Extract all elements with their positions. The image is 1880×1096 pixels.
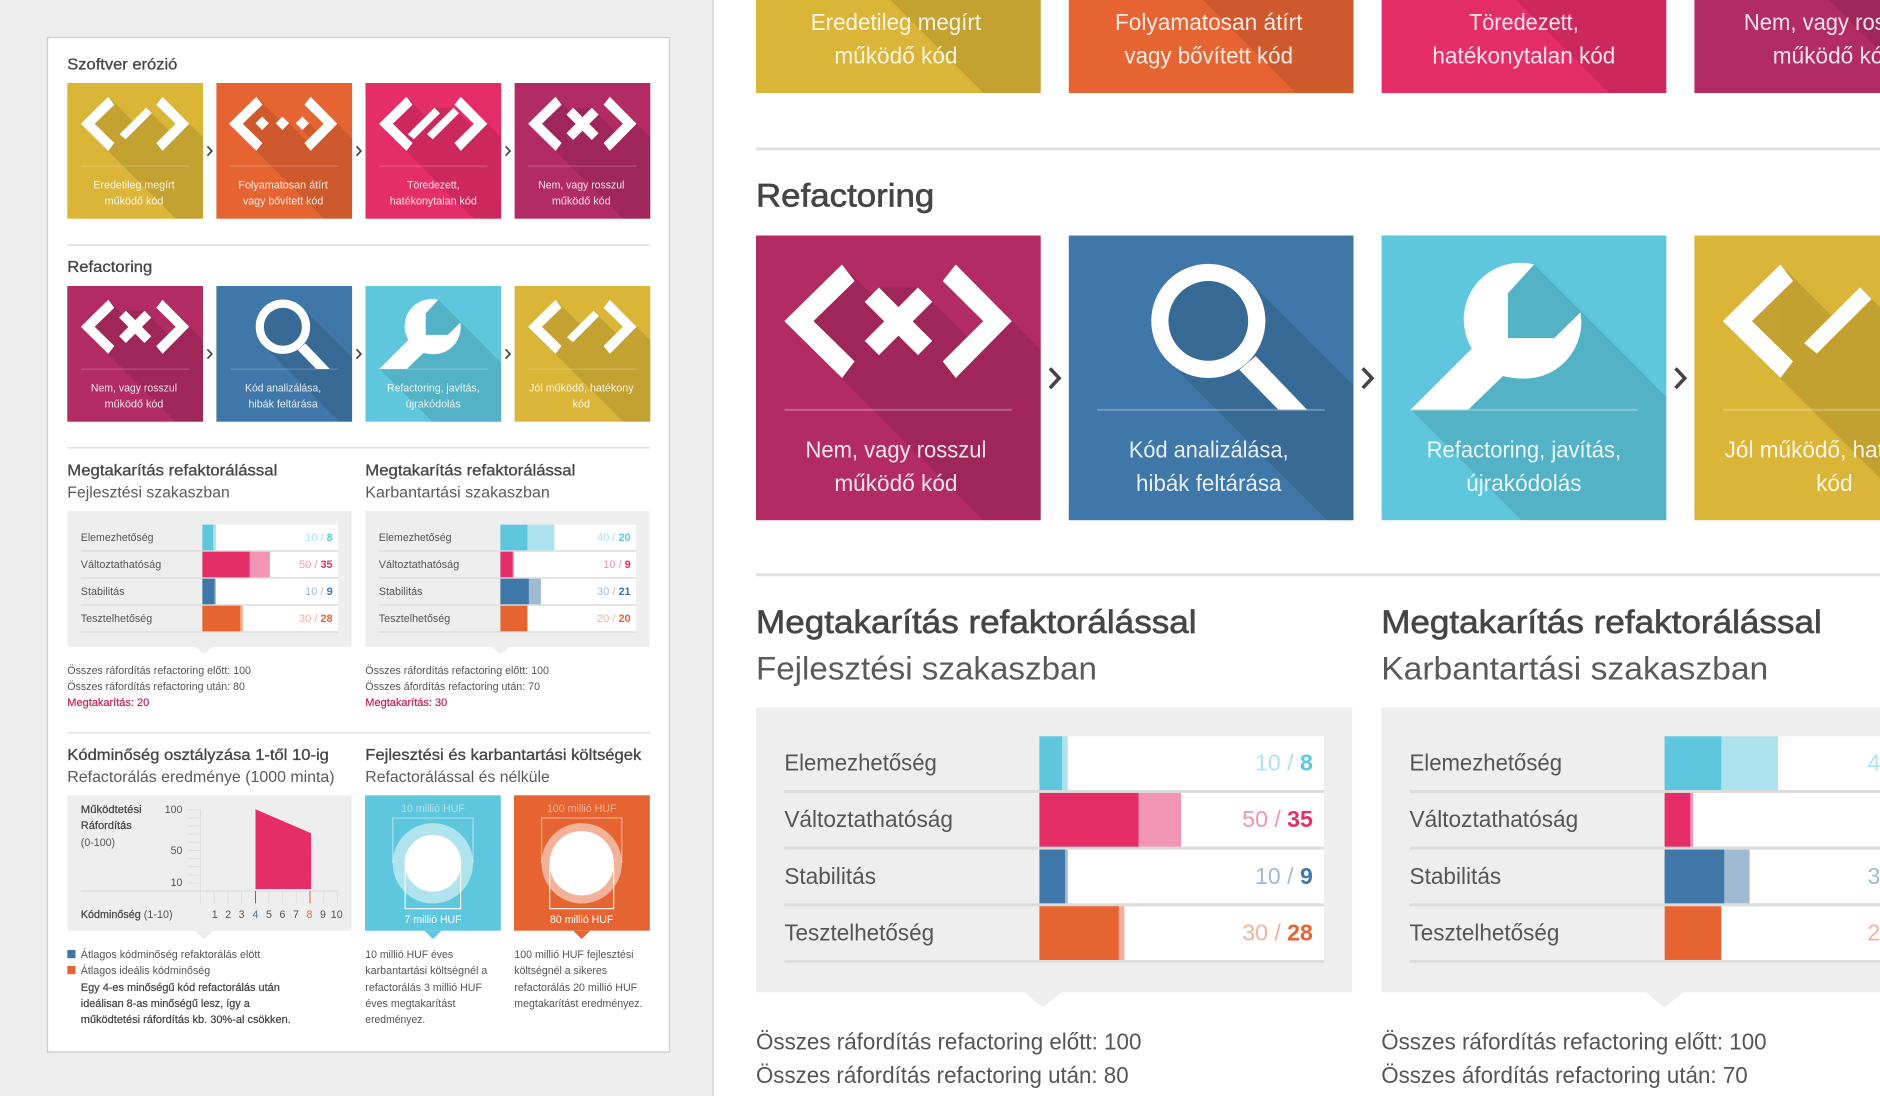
row: refactoring tiles <box>67 286 650 422</box>
right panel background <box>712 0 1880 1096</box>
area chart: 9 <box>320 909 326 921</box>
zoom divider <box>756 147 1880 150</box>
bar chart: 30 / 21 <box>597 586 631 598</box>
text: fejlesztési megtakarítás: refactorálás 20 millió HUF <box>514 982 637 994</box>
bar chart: Tesztelhetőség <box>81 613 152 625</box>
zoom bar chart: Elemezhetőség <box>784 750 937 776</box>
heading: Megtakarítás refaktorálással <box>365 462 575 479</box>
zoom tile: folyamatosan átírt kód: Folyamatosan átírt <box>1115 9 1303 35</box>
summary text: Megtakarítás: 20 <box>67 697 149 709</box>
text: karbantartási megtakarítás: refactorálás 3 millió HUF <box>365 982 482 994</box>
text: fejlesztési megtakarítás: 100 millió HUF fejlesztési <box>514 949 634 961</box>
divider <box>67 244 650 246</box>
text: karbantartási megtakarítás: karbantartási költségnél a <box>365 965 488 977</box>
zoom tile: töredezett kód: Töredezett, <box>1469 9 1579 35</box>
bar chart: 10 / 8 <box>305 532 333 544</box>
legend: működtetési ráfordítás kb. 30%-al csökken. <box>81 1014 291 1026</box>
subheading: Refactorálás eredménye (1000 minta) <box>67 769 335 786</box>
divider <box>67 447 650 449</box>
sheet card <box>48 38 670 1052</box>
tile: töredezett kód: hatékonytalan kód <box>390 196 477 208</box>
tile: rosszul működő kód: Nem, vagy rosszul <box>538 180 624 192</box>
tile: rosszul működő kód <box>514 83 650 219</box>
text: karbantartási megtakarítás: eredményez. <box>365 1014 425 1026</box>
summary text <box>67 665 251 709</box>
zoom bar chart <box>1381 708 1880 1008</box>
zoom subheading: Fejlesztési szakaszban <box>756 650 1097 686</box>
bar chart: Stabilitás <box>379 586 423 598</box>
zoom arrow <box>1363 368 1372 388</box>
heading: Megtakarítás refaktorálással <box>67 462 277 479</box>
legend: Átlagos ideális kódminőség <box>81 964 210 977</box>
zoom tile: refactoring, javítás: Refactoring, javítás, <box>1427 436 1621 462</box>
zoom bar chart: 10 / 8 <box>1255 750 1313 776</box>
tile: jól működő kód: Jól működő, hatékony <box>529 383 634 395</box>
zoom arrow <box>1676 368 1685 388</box>
zoom bar chart: 10 / 9 <box>1255 863 1313 889</box>
arrow <box>356 146 361 156</box>
tile: refactoring, javítás: újrakódolás <box>406 399 461 411</box>
area chart: 50 <box>171 845 182 857</box>
tile: kód analizálása <box>216 286 352 422</box>
arrow <box>207 349 212 359</box>
tile: rosszul működő kód: működő kód <box>105 399 163 411</box>
bar chart: Tesztelhetőség <box>379 613 450 625</box>
left page background <box>0 0 712 1096</box>
tile: rosszul működő kód: Nem, vagy rosszul <box>91 383 177 395</box>
panel: megtakarítás fejlesztési szakaszban <box>67 462 352 709</box>
tile: eredetileg megírt kód: működő kód <box>105 196 163 208</box>
bar chart <box>365 511 650 654</box>
zoom bar chart: Tesztelhetőség <box>784 919 934 945</box>
text: fejlesztési megtakarítás: költségnél a sikeres <box>514 965 607 977</box>
text: karbantartási megtakarítás: éves megtakarítást <box>365 998 456 1010</box>
area chart: 5 <box>266 909 272 921</box>
tile: jól működő kód <box>514 286 650 422</box>
heading: Szoftver erózió: Szoftver erózió <box>67 57 177 74</box>
cost diagram: karbantartás: 10 millió HUF <box>401 803 465 815</box>
text: fejlesztési megtakarítás <box>514 949 642 1010</box>
tile: kód analizálása: Kód analizálása, <box>245 383 321 395</box>
bar chart: 40 / 20 <box>597 532 631 544</box>
area chart: 4 <box>253 909 259 921</box>
zoom tile: rosszul működő kód <box>1694 0 1880 94</box>
zoom row: software erosion tiles <box>756 0 1880 94</box>
tile: eredetileg megírt kód: Eredetileg megírt <box>93 180 175 192</box>
summary text: Összes ráfordítás refactoring után: 80 <box>67 681 245 693</box>
arrow <box>207 146 212 156</box>
summary text: Összes áfordítás refactoring után: 70 <box>365 681 540 693</box>
area chart <box>67 795 352 939</box>
zoom tile: kód analizálása <box>1068 236 1354 520</box>
bar chart: Elemezhetőség <box>379 532 452 544</box>
tile: folyamatosan átírt kód <box>216 83 352 219</box>
bar chart <box>67 511 352 654</box>
area chart: 10 <box>171 877 182 889</box>
subheading: Karbantartási szakaszban <box>365 485 550 502</box>
area chart: 2 <box>225 909 231 921</box>
zoom tile: eredetileg megírt kód: Eredetileg megírt <box>811 9 982 35</box>
area chart: 6 <box>279 909 285 921</box>
text: karbantartási megtakarítás: 10 millió HUF éves <box>365 949 454 961</box>
subheading: Refactorálással és nélküle <box>365 769 550 786</box>
tile: folyamatosan átírt kód: Folyamatosan átírt <box>238 180 328 192</box>
zoom bar chart: Stabilitás <box>784 863 876 889</box>
zoom heading: Megtakarítás refaktorálással <box>756 604 1197 640</box>
zoom summary text: Összes áfordítás refactoring után: 70 <box>1381 1062 1748 1088</box>
summary text <box>365 665 549 709</box>
heading: Fejlesztési és karbantartási költségek <box>365 747 642 764</box>
tile: töredezett kód <box>366 83 502 219</box>
area chart: 10 <box>331 909 343 921</box>
zoom heading: Refactoring: Refactoring <box>756 178 934 214</box>
zoom bar chart <box>756 708 1352 1008</box>
cost diagram: fejlesztés: 100 millió HUF <box>547 803 617 815</box>
zoom tile: eredetileg megírt kód <box>756 0 1041 94</box>
cost diagram: karbantartás: 7 millió HUF <box>404 914 462 926</box>
zoom summary text <box>756 1029 1141 1088</box>
legend: Egy 4-es minőségű kód refactorálás után <box>81 982 280 994</box>
tile: kód analizálása: hibák feltárása <box>248 399 319 411</box>
arrow <box>356 349 361 359</box>
bar chart: 10 / 9 <box>305 586 333 598</box>
zoom tile: refactoring, javítás <box>1382 236 1666 520</box>
heading: Kódminőség osztályzása 1-től 10-ig <box>67 747 329 764</box>
zoom tile: kód analizálása: hibák feltárása <box>1136 470 1282 496</box>
text: karbantartási megtakarítás <box>365 949 488 1026</box>
zoom summary text: Összes ráfordítás refactoring után: 80 <box>756 1062 1129 1088</box>
zoom tile: rosszul működő kód <box>756 236 1041 520</box>
panel separator <box>712 0 714 1096</box>
full infographic sheet <box>46 36 670 1053</box>
tile: refactoring, javítás <box>366 286 502 422</box>
legend <box>67 948 291 1026</box>
area chart: (0-100) <box>81 837 115 849</box>
tile: rosszul működő kód: működő kód <box>552 196 611 208</box>
tile: eredetileg megírt kód <box>67 83 203 219</box>
bar chart: 20 / 20 <box>597 613 631 625</box>
zoom bar chart: Változtathatóság <box>784 806 953 832</box>
cost diagram: karbantartás <box>365 795 501 939</box>
bar chart: Elemezhetőség <box>81 532 154 544</box>
bar chart: 30 / 28 <box>299 613 333 625</box>
zoom tile: refactoring, javítás: újrakódolás <box>1466 470 1582 496</box>
arrow <box>506 349 510 359</box>
legend: ideálisan 8-as minőségű lesz, így a <box>81 998 251 1010</box>
zoom tile: jól működő kód: kód <box>1816 470 1853 496</box>
row: software erosion tiles <box>67 83 650 219</box>
bar chart: 10 / 9 <box>603 559 631 571</box>
zoom row: refactoring tiles <box>756 236 1880 520</box>
area chart: 8 <box>306 909 312 921</box>
bar chart: Stabilitás <box>81 586 125 598</box>
zoom tile: folyamatosan átírt kód <box>1068 0 1354 94</box>
zoom arrow <box>1050 368 1059 388</box>
zoom tile: töredezett kód <box>1382 0 1666 94</box>
text: fejlesztési megtakarítás: megtakarítást eredményez. <box>514 998 642 1010</box>
area chart: 7 <box>293 909 299 921</box>
legend: Átlagos kódminőség refaktorálás elött <box>81 948 260 961</box>
zoom panel: fejlesztési szakasz <box>756 604 1352 1088</box>
area chart: 1 <box>212 909 218 921</box>
panel: kódminőség osztályzása <box>67 747 352 1026</box>
bar chart: Változtathatóság <box>81 559 161 571</box>
tile: folyamatosan átírt kód: vagy bővített kód <box>243 196 323 208</box>
zoom subheading: Karbantartási szakaszban <box>1381 650 1768 686</box>
tile: jól működő kód: kód <box>573 399 590 411</box>
heading: Refactoring: Refactoring <box>67 259 152 276</box>
panel: fejlesztési és karbantartási költségek <box>365 747 650 1026</box>
arrow <box>506 146 510 156</box>
zoom bar chart: Elemezhetőség <box>1410 750 1562 776</box>
zoom panel: karbantartási szakasz <box>1381 604 1880 1088</box>
zoom tile: folyamatosan átírt kód: vagy bővített kód <box>1125 43 1293 69</box>
zoom summary text: Összes ráfordítás refactoring előtt: 100 <box>1381 1029 1767 1055</box>
tile: töredezett kód: Töredezett, <box>407 180 459 192</box>
area chart: Ráfordítás <box>81 820 132 832</box>
tile: rosszul működő kód <box>67 286 203 422</box>
zoom tile: kód analizálása: Kód analizálása, <box>1129 436 1289 462</box>
magnified detail panel <box>756 0 1880 1088</box>
zoom bar chart: 30 / 28 <box>1242 919 1313 945</box>
bar chart: Változtathatóság <box>379 559 459 571</box>
subheading: Fejlesztési szakaszban <box>67 485 230 502</box>
zoom bar chart: Változtathatóság <box>1410 806 1578 832</box>
zoom summary text <box>1381 1029 1767 1088</box>
zoom tile: eredetileg megírt kód: működő kód <box>834 43 958 69</box>
zoom heading: Megtakarítás refaktorálással <box>1381 604 1822 640</box>
zoom bar chart: Tesztelhetőség <box>1410 919 1559 945</box>
zoom summary text: Összes ráfordítás refactoring előtt: 100 <box>756 1029 1141 1055</box>
zoom divider <box>756 573 1880 576</box>
zoom tile: töredezett kód: hatékonytalan kód <box>1432 43 1615 69</box>
area chart: Működtetési <box>81 804 142 816</box>
cost diagram: fejlesztés: 80 millió HUF <box>550 914 614 926</box>
area chart: 100 <box>165 804 182 816</box>
summary text: Megtakarítás: 30 <box>365 697 447 709</box>
zoom tile: rosszul működő kód: Nem, vagy rosszul <box>806 436 986 462</box>
zoom bar chart: Stabilitás <box>1410 863 1501 889</box>
area chart: Kódminőség (1-10) <box>81 909 173 921</box>
tile: refactoring, javítás: Refactoring, javítás, <box>387 383 480 395</box>
zoom tile: jól működő kód <box>1694 236 1880 520</box>
area chart: 3 <box>239 909 245 921</box>
summary text: Összes ráfordítás refactoring előtt: 100 <box>67 665 251 677</box>
zoom bar chart: 50 / 35 <box>1242 806 1313 832</box>
panel: megtakarítás karbantartási szakaszban <box>365 462 650 709</box>
summary text: Összes ráfordítás refactoring előtt: 100 <box>365 665 549 677</box>
bar chart: 50 / 35 <box>299 559 333 571</box>
divider <box>67 732 650 733</box>
zoom tile: rosszul működő kód: működő kód <box>834 470 958 496</box>
cost diagram: fejlesztés <box>514 795 650 939</box>
